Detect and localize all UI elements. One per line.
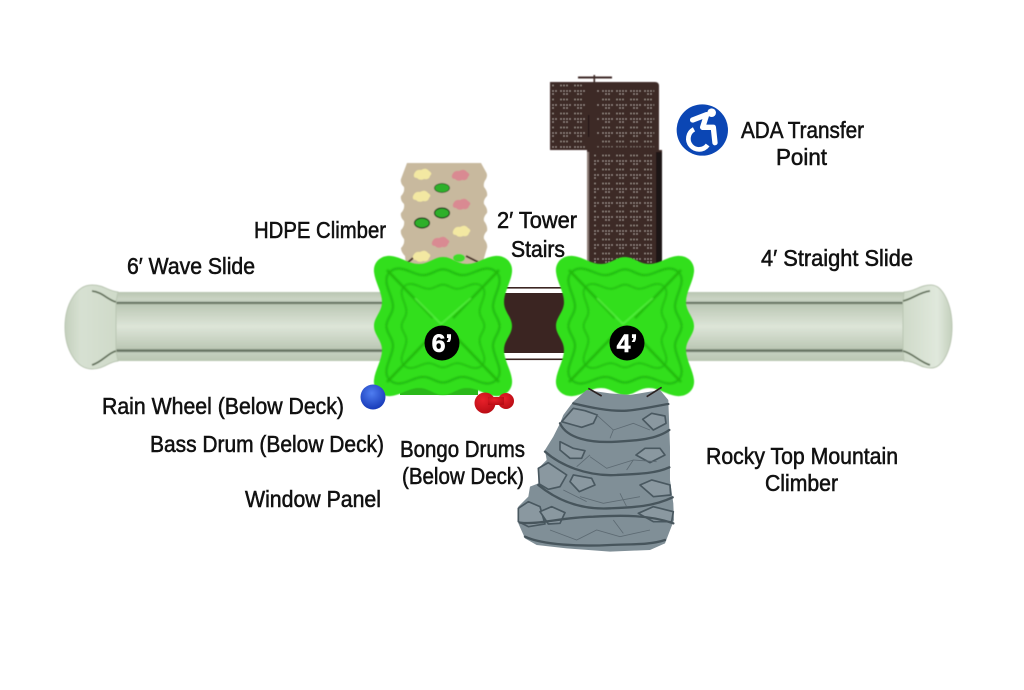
deck bridge between towers (500, 287, 568, 360)
label: ADA transfer point: Point (776, 144, 828, 170)
height badge 6: 6’ (432, 330, 452, 358)
HDPE climber panel (401, 163, 487, 266)
6' wave slide (65, 285, 385, 369)
label: ADA transfer point (741, 117, 864, 170)
rain wheel ball (360, 384, 386, 410)
label: 2' tower stairs: Stairs (511, 236, 565, 262)
under-deck strip (400, 385, 478, 395)
label: HDPE climber: HDPE Climber (254, 217, 386, 243)
height badge 6 (424, 326, 460, 360)
label: bongo drums (400, 436, 525, 489)
bongo drums (474, 392, 514, 414)
label: bass drum: Bass Drum (Below Deck) (150, 431, 384, 457)
platform 4ft (556, 256, 694, 396)
label: rocky top mountain climber: Rocky Top Mountain (706, 443, 898, 469)
label: 4' straight slide: 4′ Straight Slide (761, 245, 913, 271)
label: window panel: Window Panel (245, 486, 381, 512)
label: rain wheel: Rain Wheel (Below Deck) (102, 393, 344, 419)
label: bongo drums: Bongo Drums (400, 436, 525, 462)
2' tower stairs (550, 75, 662, 268)
label: rocky top mountain climber: Climber (765, 470, 838, 496)
rocky top mountain climber (518, 387, 674, 552)
4' straight slide (680, 285, 952, 368)
label: 2' tower stairs (497, 207, 577, 262)
height badge 4: 4’ (617, 330, 637, 358)
rock blocks (518, 408, 673, 527)
icon: ADA wheelchair (677, 104, 728, 156)
label: 6' wave slide: 6′ Wave Slide (127, 253, 255, 279)
climbing holds (413, 169, 470, 262)
label: 2' tower stairs: 2′ Tower (497, 207, 577, 233)
rock strata (520, 403, 673, 546)
label: ADA transfer point: ADA Transfer (741, 117, 864, 143)
height badge 4 (610, 326, 644, 360)
label: rocky top mountain climber (706, 443, 898, 496)
platform 6ft (374, 256, 512, 396)
label: bongo drums: (Below Deck) (402, 463, 524, 489)
